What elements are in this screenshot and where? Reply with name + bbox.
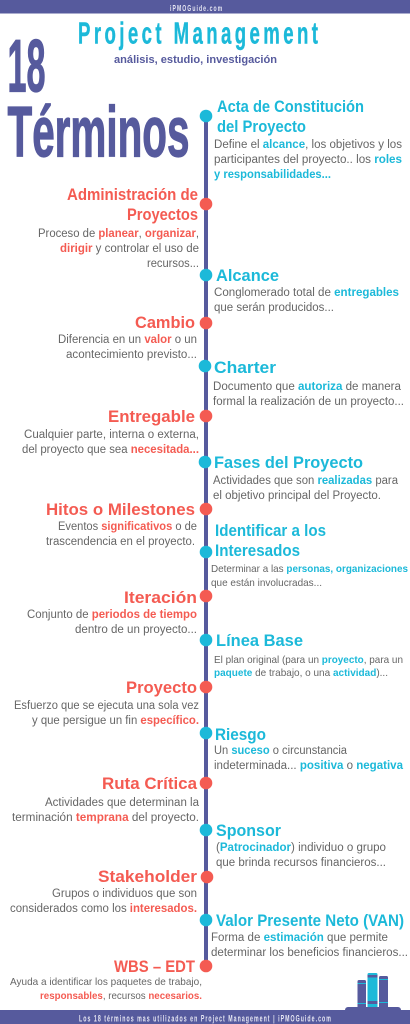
- term: Riesgo: [214, 726, 404, 772]
- term: Hitos o Milestones: [46, 501, 197, 548]
- term: Acta de Constitución: Define el alcance, los objetivos y los: [214, 139, 402, 151]
- term: Identificar a los Interesados: Interesados: [215, 542, 300, 560]
- term: Riesgo: Riesgo: [215, 726, 266, 744]
- term: Acta de Constitución: del Proyecto: [217, 118, 306, 136]
- term: Proyecto: [14, 679, 199, 727]
- term: Hitos o Milestones: trascendencia en el proyecto.: [46, 536, 195, 548]
- term: Proyecto: Proyecto: [126, 679, 197, 697]
- term: Fases del Proyecto: Actividades que son realizadas para: [213, 475, 399, 487]
- term: Ruta Crítica: [12, 775, 200, 824]
- heading: Términos: Términos: [8, 94, 190, 172]
- term: Valor Presente Neto: determinar los beneficios financieros...: [211, 947, 408, 959]
- term: Administración de Proyectos: Administración de: [67, 186, 198, 204]
- term: Identificar a los Interesados: Determinar a las personas, organizaciones: [211, 563, 408, 575]
- term: Sponsor: [216, 822, 386, 869]
- footer banner: [0, 1010, 410, 1024]
- term: Iteración: Conjunto de periodos de tiempo: [27, 609, 197, 621]
- term: Sponsor: que brinda recursos financieros...: [216, 857, 386, 869]
- term: Hitos o Milestones: Hitos o Milestones: [46, 501, 195, 519]
- term: Entregable: [22, 408, 199, 456]
- term: Administración de Proyectos: recursos...: [147, 258, 199, 270]
- term: Cambio: Cambio: [135, 314, 195, 332]
- term: Cambio: Diferencia en un valor o un: [58, 334, 197, 346]
- term: Charter: Documento que autoriza de manera: [213, 381, 402, 393]
- term: Sponsor: (Patrocinador) individuo o grupo: [216, 842, 386, 854]
- term: Entregable: Cualquier parte, interna o externa,: [24, 429, 199, 441]
- term: Valor Presente Neto: [211, 912, 408, 959]
- term: Ruta Crítica: Ruta Crítica: [102, 775, 198, 793]
- term: WBS - EDT: Ayuda a identificar los paquetes de trabajo,: [10, 976, 202, 988]
- term: Charter: formal la realización de un proyecto...: [213, 396, 404, 408]
- term: Iteración: [27, 589, 197, 636]
- term: Línea Base: Línea Base: [216, 632, 303, 650]
- term: Stakeholder: considerados como los interesados.: [10, 903, 197, 915]
- term: Riesgo: Un suceso o circunstancia: [214, 745, 348, 757]
- term: Proyecto: Esfuerzo que se ejecuta una sola vez: [14, 700, 199, 712]
- term: Administración de Proyectos: Proceso de planear, organizar,: [38, 228, 199, 240]
- term: Stakeholder: Stakeholder: [98, 868, 198, 886]
- title: Project Management: Project Management: [78, 17, 318, 51]
- term: Valor Presente Neto: Forma de estimación que permite: [211, 932, 388, 944]
- timeline axis: [199, 110, 213, 972]
- term: Acta de Constitución: participantes del proyecto.. los roles: [214, 154, 402, 166]
- subtitle: análisis, estudio, investigación: [114, 54, 277, 66]
- term: Proyecto: y que persigue un fin específico.: [32, 715, 199, 727]
- term: Entregable: del proyecto que sea necesitada...: [22, 444, 199, 456]
- term: Sponsor: Sponsor: [216, 822, 282, 840]
- term: Ruta Crítica: Actividades que determinan la: [45, 797, 200, 809]
- term: Iteración: Iteración: [124, 589, 197, 607]
- term: Hitos o Milestones: Eventos significativos o de: [58, 521, 197, 533]
- term: WBS - EDT: WBS – EDT: [114, 958, 195, 976]
- term: WBS - EDT: [10, 958, 202, 1002]
- text: 18: [8, 24, 46, 108]
- term: Acta de Constitución: y responsabilidades...: [214, 169, 331, 181]
- term: Alcance: [214, 267, 399, 314]
- term: Cambio: [58, 314, 197, 361]
- top banner: iPMOGuide.com: [170, 5, 222, 13]
- term: Charter: [213, 359, 404, 408]
- term: Alcance: Conglomerado total de entregables: [214, 287, 399, 299]
- term: Administración de Proyectos: [38, 186, 199, 270]
- term: Charter: Charter: [214, 359, 277, 377]
- term: Ruta Crítica: terminación temprana del proyecto.: [12, 812, 199, 824]
- term: Identificar a los Interesados: que están involucradas...: [211, 577, 322, 589]
- term: Riesgo: indeterminada... positiva o negativa: [214, 760, 404, 772]
- term: Iteración: dentro de un proyecto...: [75, 624, 197, 636]
- term: Acta de Constitución: Acta de Constitución: [217, 98, 364, 116]
- term: Fases del Proyecto: el objetivo principal del Proyecto.: [213, 490, 381, 502]
- footer banner: Los 18 términos mas utilizados en Project Management | iPMOGuide.com: [79, 1013, 331, 1024]
- term: Línea Base: El plan original (para un proyecto, para un: [214, 654, 403, 666]
- term: Administración de Proyectos: Proyectos: [127, 206, 198, 224]
- term: Alcance: Alcance: [216, 267, 279, 285]
- term: Stakeholder: Grupos o individuos que son: [52, 888, 197, 900]
- icon: books: [345, 973, 401, 1015]
- term: Fases del Proyecto: Fases del Proyecto: [214, 454, 363, 472]
- term: Entregable: Entregable: [108, 408, 195, 426]
- term: Línea Base: paquete de trabajo, o una actividad)...: [214, 667, 388, 679]
- term: Identificar a los Interesados: [211, 522, 408, 589]
- term: Alcance: que serán producidos...: [214, 302, 334, 314]
- term: Stakeholder: [10, 868, 198, 915]
- term: Administración de Proyectos: dirigir y controlar el uso de: [60, 243, 199, 255]
- term: Fases del Proyecto: [213, 454, 399, 502]
- term: Línea Base: [214, 632, 403, 679]
- term: Cambio: acontecimiento previsto...: [66, 349, 197, 361]
- term: WBS - EDT: responsables, recursos necesarios.: [40, 990, 202, 1002]
- top banner: [0, 0, 410, 14]
- term: Identificar a los Interesados: Identificar a los: [215, 522, 326, 540]
- term: Acta de Constitución: [214, 98, 402, 181]
